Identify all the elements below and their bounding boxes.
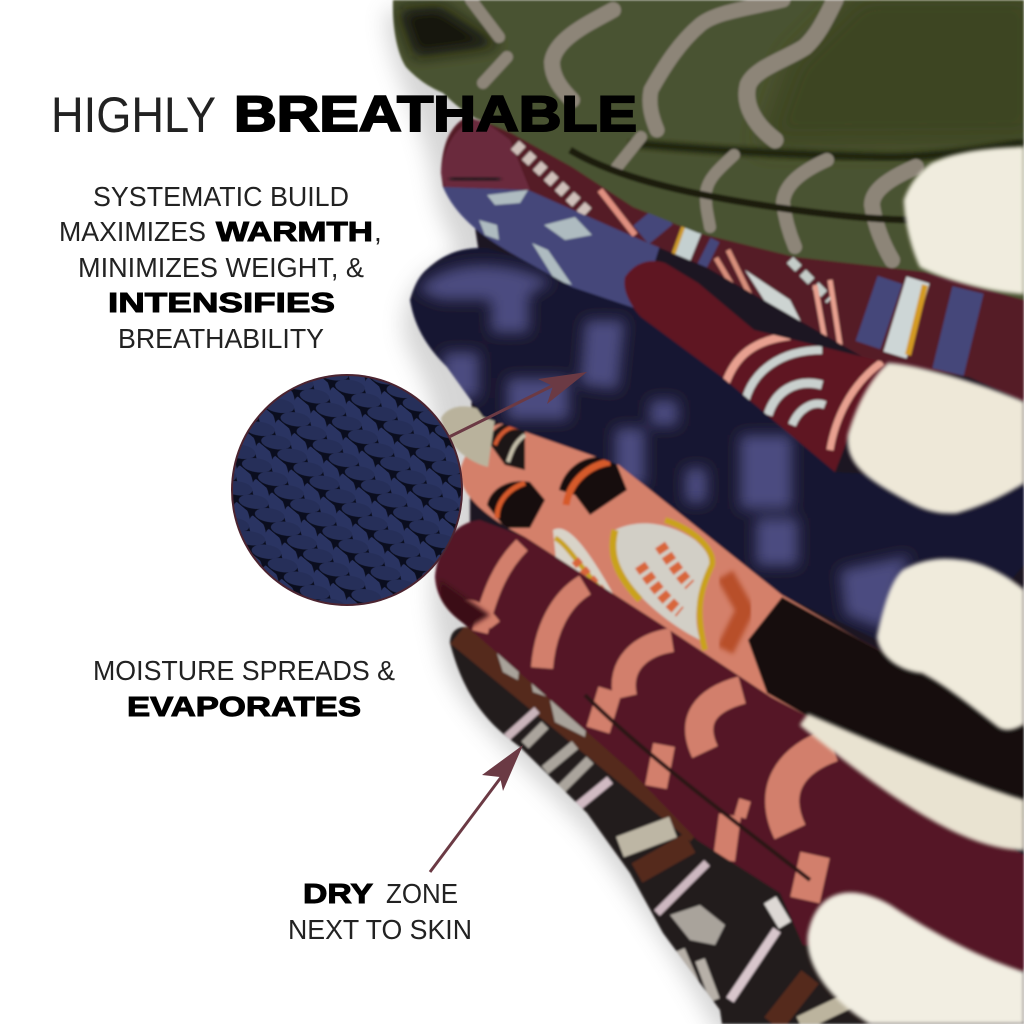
text block: systematic build: MINIMIZES WEIGHT, &: [78, 252, 364, 283]
text block: systematic build: MAXIMIZES: [59, 216, 206, 247]
stack dark underlay: [460, 130, 1024, 1024]
text block: moisture: EVAPORATES: [127, 691, 361, 722]
sock: top maroon multi stripe: [435, 110, 1024, 410]
sock: olive green: [390, 0, 1024, 305]
knit detail circle: [231, 374, 463, 606]
text block: dry zone: NEXT TO SKIN: [288, 914, 472, 945]
fleece: fourth cream toe: [808, 893, 1024, 1024]
text block: dry zone: DRY: [303, 878, 373, 909]
sock: periwinkle back: [442, 185, 660, 308]
text block: dry zone: [288, 878, 472, 945]
sock: navy: [405, 240, 1024, 650]
title: [51, 86, 637, 143]
photo: stack of knit socks: [390, 0, 1024, 1024]
sock: orange patterned: [460, 422, 1024, 798]
text block: dry zone: ZONE: [386, 878, 458, 909]
fleece: third cream toe: [877, 559, 1024, 730]
title: BREATHABLE: [234, 86, 637, 142]
text block: systematic build: INTENSIFIES: [108, 287, 335, 318]
text block: systematic build: ,: [374, 216, 382, 247]
text block: systematic build: BREATHABILITY: [118, 323, 324, 354]
sock: black patterned: [440, 620, 880, 1024]
text block: systematic build: [59, 181, 382, 354]
sock stack shadow: [386, 10, 1017, 1024]
sock: maroon block: [623, 260, 888, 473]
title: HIGHLY: [51, 87, 216, 143]
fleece: cream band: [800, 714, 1024, 850]
fleece: top cream toe: [904, 147, 1024, 294]
beige toe: [441, 406, 495, 467]
text block: moisture: [93, 655, 395, 722]
text block: systematic build: SYSTEMATIC BUILD: [93, 181, 349, 212]
text block: systematic build: WARMTH: [216, 216, 373, 247]
text block: moisture: MOISTURE SPREADS &: [93, 655, 395, 686]
sock: maroon striped: [430, 510, 1024, 980]
arrow: to navy sock: [449, 372, 587, 437]
arrow: to dry zone: [430, 745, 523, 872]
fleece: second cream toe: [848, 363, 1024, 513]
